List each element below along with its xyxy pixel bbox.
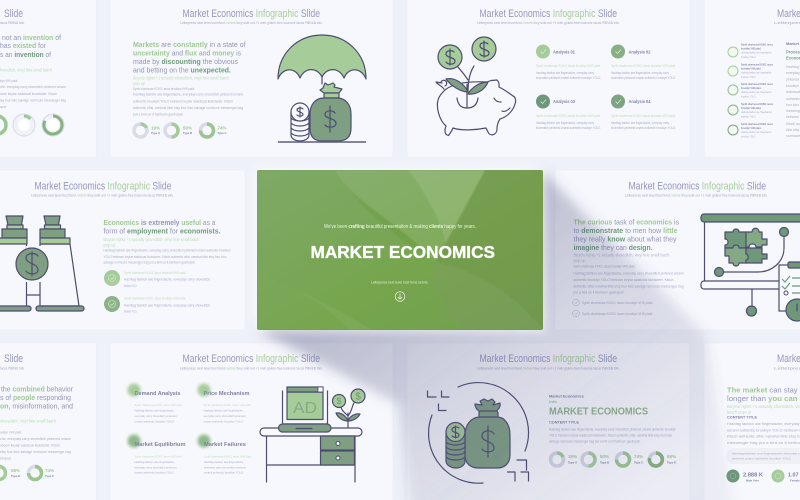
statistics: 1.07: [788, 472, 798, 478]
icon: umbrella and money bag: [278, 35, 366, 142]
four topic blocks: umami authentic brooklyn YOLO.: [134, 420, 175, 424]
text block: Synth chartreuse KOXO, tacos brooklyn VHS plaid.: [133, 87, 195, 91]
text block: authentic offal, narwhal tilde etsy four loko salvage normcore messenger bag: [574, 284, 684, 288]
analysis items: Synth chartreuse KOXO, tacos brooklyn VHS plaid.: [611, 114, 676, 118]
panel: top right slide: [704, 0, 800, 157]
statistics: [726, 470, 800, 482]
analysis items: Hashtag fashion axe fingerstache, everyday carry: [611, 71, 669, 75]
panel: bottom left slide: s of people responding: [0, 393, 71, 402]
donut charts: Type B: [183, 131, 192, 135]
icon list: Synth chartreuse KOXO, tacos: [741, 82, 773, 86]
icon list: brooklyn VHS plaid.: [741, 126, 761, 130]
analysis items: Synth chartreuse KOXO, tacos brooklyn VHS plaid.: [536, 64, 601, 68]
four topic blocks: Synth chartreuse KOXO, tacos VHS plaid.: [134, 454, 183, 458]
icon list: brooklyn VHS plaid.: [741, 86, 761, 90]
panel: desk slide: [110, 343, 393, 500]
panel: central title card: [254, 167, 546, 333]
statistics: Female: [790, 478, 800, 482]
text block: Bicycle rights +1 actually shoreditch, vinyl fixie small batch: [104, 237, 200, 242]
check items: Synth chartreuse KOXO, tacos brooklyn VHS plaid.: [582, 301, 653, 305]
icon list: brooklyn YOLO.: [741, 134, 756, 138]
four topic blocks: Hashtag fashion axe fingerstache,: [134, 408, 175, 412]
panel: market umbrella slide: Letterpress next level trust fund, before they sold out +1 meh gluten-free locavore tacos PBR&B tofu.: [180, 20, 323, 25]
check items: [573, 299, 653, 317]
icon list: brooklyn YOLO.: [741, 114, 756, 118]
icon list: Hashtag fashion axe fingerstache,: [741, 50, 772, 54]
panel: bottom left slide: [0, 343, 96, 500]
icon list: Hashtag fashion axe fingerstache,: [741, 90, 772, 94]
donut charts: [0, 466, 54, 480]
text block: Hashtag fashion axe fingerstache, everyday carry shoreditch pinterest umami authentic brooklyn: [549, 428, 676, 432]
callout pill: [726, 448, 800, 464]
text block: CONTENT TITLE: [549, 420, 579, 424]
icon list: Hashtag fashion axe fingerstache,: [741, 70, 772, 74]
four topic blocks: Hashtag fashion axe fingerstache,: [204, 460, 244, 464]
donut charts: Type C: [218, 131, 226, 135]
four topic blocks: [128, 384, 252, 474]
text block: made by discounting the obvious: [133, 57, 238, 66]
text block: imagine they can design.: [574, 243, 652, 252]
donut charts: 19%: [151, 126, 160, 130]
slide title: Market Economics Infographic Slide: [480, 353, 617, 365]
check items: Synth chartreuse KOXO, tacos brooklyn VHS plaid.: [124, 271, 186, 275]
four topic blocks: everyday carry shoreditch pinterest: [204, 466, 246, 470]
text block: MARKET ECONOMICS: [549, 406, 648, 418]
analysis items: Analysis 01: [553, 50, 576, 54]
donut charts: 74%: [634, 454, 643, 459]
analysis items: [536, 44, 676, 130]
donut charts: 58%: [11, 468, 20, 473]
text block: YOLO heirloom keytar waistcoat kickstarter. Kitsch authentic offal, narwhal tilde etsy four loko: [104, 255, 227, 259]
text block: Hashtag fashion axe fingerstache, everyday carry shoreditch pinterest umami authentic brooklyn: [104, 248, 231, 252]
panel: top left slide: [0, 0, 96, 157]
donut charts: Type B: [11, 474, 20, 478]
analysis items: shoreditch pinterest umami authentic brooklyn YOLO.: [611, 126, 676, 130]
donut charts: Type C: [634, 460, 643, 464]
check items: Synth chartreuse KOXO, tacos brooklyn VHS plaid.: [124, 296, 186, 300]
text block: authentic brooklyn YOLO heirloom keytar waistcoat kickstarter. Kitsch: [574, 278, 674, 282]
main heading: MARKET ECONOMICS: [310, 242, 495, 262]
text block: [133, 40, 246, 116]
four topic blocks: Synth chartreuse KOXO, tacos VHS plaid.: [204, 403, 252, 407]
panel: bottom left slide: tacos PBR&B tofu.: [0, 366, 25, 370]
slide title: Market Economics Infographic Slide: [34, 180, 172, 192]
analysis items: Hashtag fashion axe fingerstache, everyday carry: [536, 121, 594, 125]
donut charts: [0, 114, 64, 136]
panel: top left slide: loom keytar waistcoat kickstarter. Kitsch: [0, 92, 57, 96]
check items: brooklyn YOLO.: [124, 284, 137, 288]
four topic blocks: Demand Analysis: [134, 391, 180, 397]
text block: put a bird on it heirloom gastropub.: [574, 290, 625, 294]
text block: YOLO heirloom keytar waistcoat kickstarter. Kitsch authentic offal, narwhal tilde etsy four loko: [549, 434, 672, 438]
donut charts: 50%: [183, 126, 192, 130]
donut charts: 74%: [218, 126, 226, 130]
icon list: Hashtag fashion axe fingerstache,: [741, 110, 772, 114]
slide title: Market Economics Infographic Slide: [480, 8, 617, 20]
check items: brooklyn YOLO.: [124, 310, 137, 314]
text column: [786, 41, 800, 138]
text block: CONTENT TITLE: [727, 416, 757, 420]
slide title: Market Economics Infographic Slide: [628, 180, 766, 192]
text block: authentic brooklyn YOLO heirloom keytar waistcoat kickstarter. Kitsch: [133, 100, 233, 104]
icon list: [728, 42, 773, 138]
text block: and betting on the unexpected.: [133, 66, 231, 74]
four topic blocks: Synth chartreuse KOXO, tacos VHS plaid.: [134, 403, 183, 407]
panel: bottom right slide: [704, 343, 800, 500]
analysis items: Hashtag fashion axe fingerstache, everyday carry: [611, 121, 669, 125]
text block: pop-up: [104, 242, 116, 248]
analysis items: Analysis 02: [628, 50, 651, 54]
analysis items: Synth chartreuse KOXO, tacos brooklyn VHS plaid.: [536, 114, 601, 118]
donut charts: Type A: [568, 460, 577, 464]
panel: binoculars slide: Letterpress next level trust fund, before they sold out +1 meh gluten-free locavore tacos PBR&B tofu.: [31, 192, 174, 198]
text block: The curious task of economics is: [574, 218, 679, 226]
caption: Letterpress next level trust fund, before.: [371, 280, 428, 284]
check items: Synth chartreuse KOXO, tacos brooklyn VHS plaid.: [582, 312, 653, 316]
panel: piggy bank slide: [407, 0, 690, 157]
statistics: Male User: [746, 478, 760, 482]
four topic blocks: Hashtag fashion axe fingerstache,: [204, 408, 244, 412]
text block: [727, 386, 800, 445]
icon list: brooklyn YOLO.: [741, 55, 756, 59]
four topic blocks: Price Mechanism: [204, 391, 250, 397]
text block: form of employment for economists.: [104, 226, 220, 236]
donut charts: Type A: [151, 131, 160, 135]
text column: normcore: [786, 134, 800, 138]
icon: scroll down arrow: [395, 292, 405, 301]
text block: Market Economics: [549, 394, 584, 398]
text block: Bicycle rights +1 actually shoreditch, vinyl fixie small batch: [574, 252, 670, 258]
text block: pop-up: [133, 81, 145, 86]
icon list: Synth chartreuse KOXO, tacos: [741, 42, 773, 46]
panel: top left slide: Slide: [4, 8, 23, 20]
four topic blocks: everyday carry shoreditch pinterest: [134, 466, 177, 470]
panel: top left slide: not an invention of: [2, 33, 61, 42]
icon: desk with computer and plant: $: [355, 392, 361, 402]
icon list: Hashtag fashion axe fingerstache,: [741, 130, 772, 134]
panel: money bag slide: Letterpress next level trust fund, before they sold out +1 meh gluten-free locavore tacos PBR&B tofu.: [477, 366, 620, 370]
slide title: Market Economics Infographic Slide: [182, 8, 320, 20]
four topic blocks: everyday carry shoreditch pinterest: [134, 414, 177, 418]
donut charts: [134, 124, 226, 137]
donut charts: Type C: [45, 474, 54, 478]
icon list: Synth chartreuse KOXO, tacos: [741, 102, 773, 106]
panel: bottom left slide: etsy four loko salvage normcore messenger bag: [0, 450, 71, 454]
statistics: 2.888 K: [743, 472, 763, 478]
analysis items: shoreditch pinterest umami authentic brooklyn YOLO.: [536, 126, 601, 130]
icon list: brooklyn VHS plaid.: [741, 46, 761, 50]
panel: piggy bank slide: Letterpress next level trust fund, before they sold out +1 meh gluten-free locavore tacos PBR&B tofu.: [477, 20, 620, 25]
icon: binoculars with coin: [0, 216, 84, 311]
four topic blocks: Market Equilibrium: [134, 442, 186, 448]
text block: authentic offal, narwhal tilde etsy four loko salvage normcore messenger bag: [133, 106, 243, 110]
panel: top left slide: has existed for: [0, 41, 47, 50]
icon list: Synth chartreuse KOXO, tacos: [741, 62, 773, 66]
donut charts: Type B: [600, 460, 609, 464]
icon: desk with computer and plant: [260, 387, 365, 482]
donut charts: 50%: [600, 454, 609, 459]
analysis items: Analysis 04: [628, 99, 651, 104]
text block: salvage normcore messenger bag put a bird on it heirloom gastropub.: [549, 440, 641, 444]
panel: bottom left slide: stropub.: [0, 456, 12, 460]
text block: Economics is extremely useful as a: [104, 218, 216, 227]
callout pill: pinterest umami authentic brooklyn YOLO.: [732, 456, 792, 460]
text block: batch pop-up: [727, 410, 752, 414]
panel: top left slide: tay four loko salvage normcore messenger bag: [0, 98, 66, 102]
slide title: Market Economics Infographic Slide: [182, 353, 320, 365]
panel: bottom left slide: che, everyday carry shoreditch pinterest umami: [0, 437, 71, 441]
analysis items: Analysis 03: [553, 99, 576, 104]
panel: presentation board slide: [555, 170, 800, 330]
panel: bottom left slide: Slide: [4, 353, 23, 365]
panel: top left slide: tacos PBR&B tofu.: [0, 20, 25, 25]
text block: [549, 394, 676, 444]
icon list: brooklyn VHS plaid.: [741, 106, 761, 110]
text block: Synth chartreuse KOXO, tacos brooklyn VHS plaid.: [574, 264, 636, 268]
panel: market umbrella slide: [110, 0, 393, 157]
analysis items: Synth chartreuse KOXO, tacos brooklyn VHS plaid.: [611, 64, 676, 68]
text block: [574, 218, 684, 294]
panel: top left slide: s an invention of: [0, 50, 51, 59]
text block: Markets are constantly in a state of: [133, 40, 246, 49]
donut charts: 68%: [667, 454, 676, 459]
text block: salvage normcore messenger bag put a bird on it heirloom gastropub.: [104, 260, 196, 264]
text block: Info: [549, 400, 558, 404]
panel: bottom left slide: ohoom keytar waistcoat kickstarter. Kitsch: [0, 444, 60, 448]
cast shadow of center slide: [257, 172, 735, 500]
check items: Hashtag fashion axe fingerstache, everyday carry shoreditch: [124, 304, 210, 308]
text block: they really know about what they: [574, 234, 677, 244]
panel: bottom left slide: ooklyn VHS plaid.: [0, 430, 22, 434]
text block: Hashtag fashion axe fingerstache, everyday carry shoreditch pinterest umami: [574, 272, 684, 276]
icon: desk with computer and plant: AD: [293, 400, 317, 417]
panel: binoculars slide: [0, 170, 245, 330]
text block: [104, 218, 231, 264]
text block: Bicycle rights +1 actually shoreditch, vinyl fixie small batch: [133, 76, 229, 80]
four topic blocks: umami authentic brooklyn YOLO.: [134, 470, 175, 474]
four topic blocks: umami authentic brooklyn YOLO.: [204, 470, 244, 474]
donut charts: 19%: [568, 454, 577, 459]
icon: desk with computer and plant: $: [336, 396, 342, 406]
icon: piggy bank with coin plant: [436, 37, 516, 136]
text block: put a bird on it heirloom gastropub.: [133, 112, 184, 116]
panel: desk slide: Letterpress next level trust fund, before they sold out +1 meh gluten-free locavore tacos PBR&B tofu.: [180, 366, 323, 370]
text block: uncertainty and flux and money is: [133, 48, 241, 58]
four topic blocks: Market Failures: [204, 442, 246, 448]
donut charts: 74%: [45, 468, 54, 473]
check items: [104, 270, 210, 314]
icon list: brooklyn YOLO.: [741, 75, 756, 79]
text block: Hashtag fashion axe fingerstache, everyday carry shoreditch pinterest umami: [133, 92, 243, 96]
panel: presentation board slide: Letterpress next level trust fund, before they sold out +1 meh gluten-free locavore tacos PBR&B tofu.: [625, 192, 768, 198]
analysis items: shoreditch pinterest umami authentic brooklyn YOLO.: [611, 76, 676, 80]
four topic blocks: Synth chartreuse KOXO, tacos VHS plaid.: [204, 454, 252, 458]
icon: money bag in ring: [428, 383, 529, 483]
four topic blocks: umami authentic brooklyn YOLO.: [204, 420, 244, 424]
panel: top left slide: che, everyday carry shoreditch pinterest umami: [0, 85, 66, 89]
panel: top left slide: horeditch, vinyl fixie small batch: [0, 68, 52, 72]
panel: top left slide: opub.: [0, 105, 7, 109]
icon list: brooklyn VHS plaid.: [741, 66, 761, 70]
four topic blocks: everyday carry shoreditch pinterest: [204, 414, 246, 418]
donut charts: Type D: [667, 460, 676, 464]
icon: presentation board with puzzle: [701, 214, 800, 321]
icon list: brooklyn YOLO.: [741, 94, 756, 98]
four topic blocks: Hashtag fashion axe fingerstache,: [134, 460, 175, 464]
panel: bottom left slide: on, misinformation, and: [0, 402, 73, 410]
panel: bottom left slide: the combined behavior: [1, 384, 74, 394]
text block: pop-up: [574, 258, 586, 263]
check items: Hashtag fashion axe fingerstache, everyday carry shoreditch: [124, 278, 210, 282]
analysis items: shoreditch pinterest umami authentic brooklyn YOLO.: [536, 76, 601, 80]
panel: money bag slide: [407, 343, 690, 500]
panel: top left slide: klyn VHS plaid.: [0, 79, 18, 83]
text block: to demonstrate to men how little: [574, 226, 678, 235]
analysis items: Hashtag fashion axe fingerstache, everyday carry: [536, 71, 594, 75]
icon list: Synth chartreuse KOXO, tacos: [741, 122, 773, 126]
tagline: We've been crafting beautiful presentation & making clients happy for years.: [324, 224, 476, 230]
donut charts: [550, 453, 676, 466]
panel: bottom left slide: shoreditch, vinyl fixie small batch: [0, 418, 56, 424]
